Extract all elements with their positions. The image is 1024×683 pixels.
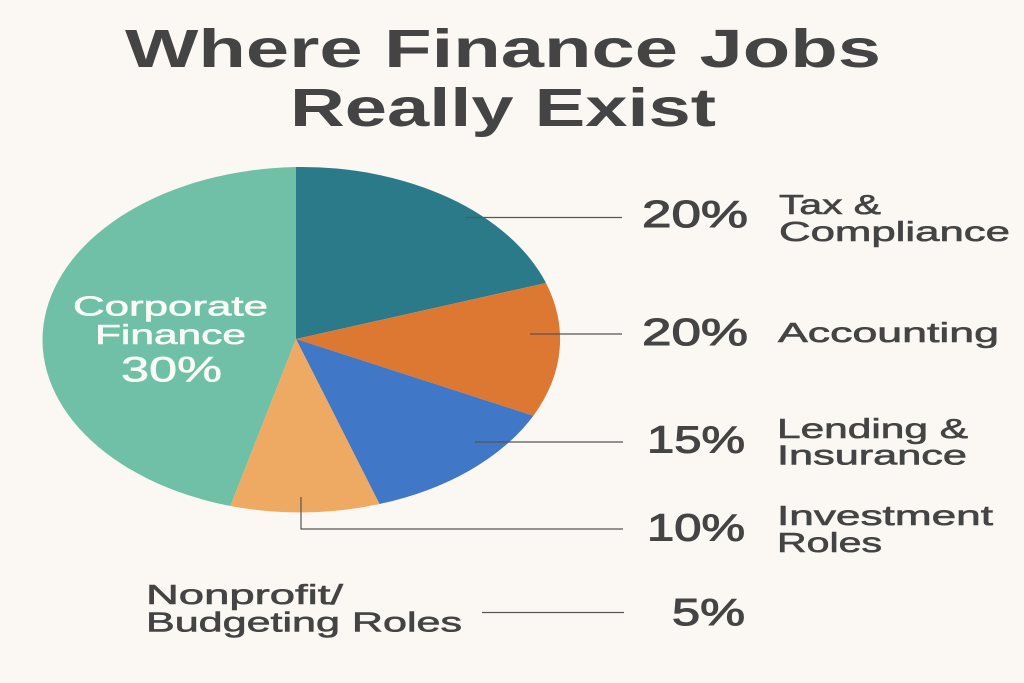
label: corporate finance 30%: 30%: [121, 350, 222, 390]
label: corporate finance 30%: Corporate: [73, 290, 268, 322]
slice: accounting: [296, 283, 560, 416]
leader line: tax and compliance: [466, 216, 622, 218]
row: investment roles: 10%: [647, 508, 745, 550]
slice: lending and insurance: [296, 339, 533, 504]
row: investment roles: [647, 500, 993, 558]
row: nonprofit and budgeting roles: Nonprofit/: [146, 579, 343, 610]
row: accounting: [642, 312, 999, 354]
row: lending and insurance: Insurance: [777, 440, 967, 470]
leader line: investment roles: [301, 497, 623, 529]
row: tax and compliance: 20%: [642, 194, 748, 236]
row: lending and insurance: [647, 413, 968, 470]
slice: tax and compliance: [296, 167, 546, 339]
row: nonprofit and budgeting roles: Budgeting Roles: [146, 606, 462, 638]
row: accounting: 20%: [642, 312, 748, 354]
label: corporate finance 30%: [73, 290, 268, 390]
row: investment roles: Investment: [777, 500, 993, 531]
leader line: accounting: [530, 333, 622, 335]
label: corporate finance 30%: Finance: [95, 319, 246, 350]
row: accounting: Accounting: [778, 317, 999, 348]
row: tax and compliance: Tax &: [779, 189, 881, 220]
leader line: lending and insurance: [475, 441, 623, 443]
title: Where Finance Jobs: [125, 19, 881, 79]
row: nonprofit and budgeting roles: [146, 579, 745, 638]
slice: investment roles: [230, 339, 380, 512]
row: investment roles: Roles: [777, 527, 882, 558]
title: Really Exist: [290, 78, 716, 138]
row: lending and insurance: Lending &: [777, 413, 968, 444]
row: tax and compliance: Compliance: [779, 216, 1010, 247]
leader line: nonprofit and budgeting roles: [482, 612, 624, 614]
row: tax and compliance: [642, 189, 1010, 247]
title: [125, 19, 881, 138]
row: lending and insurance: 15%: [647, 420, 745, 462]
slice: corporate finance: [43, 167, 296, 506]
pie chart: [43, 167, 560, 512]
row: nonprofit and budgeting roles: 5%: [672, 592, 745, 634]
